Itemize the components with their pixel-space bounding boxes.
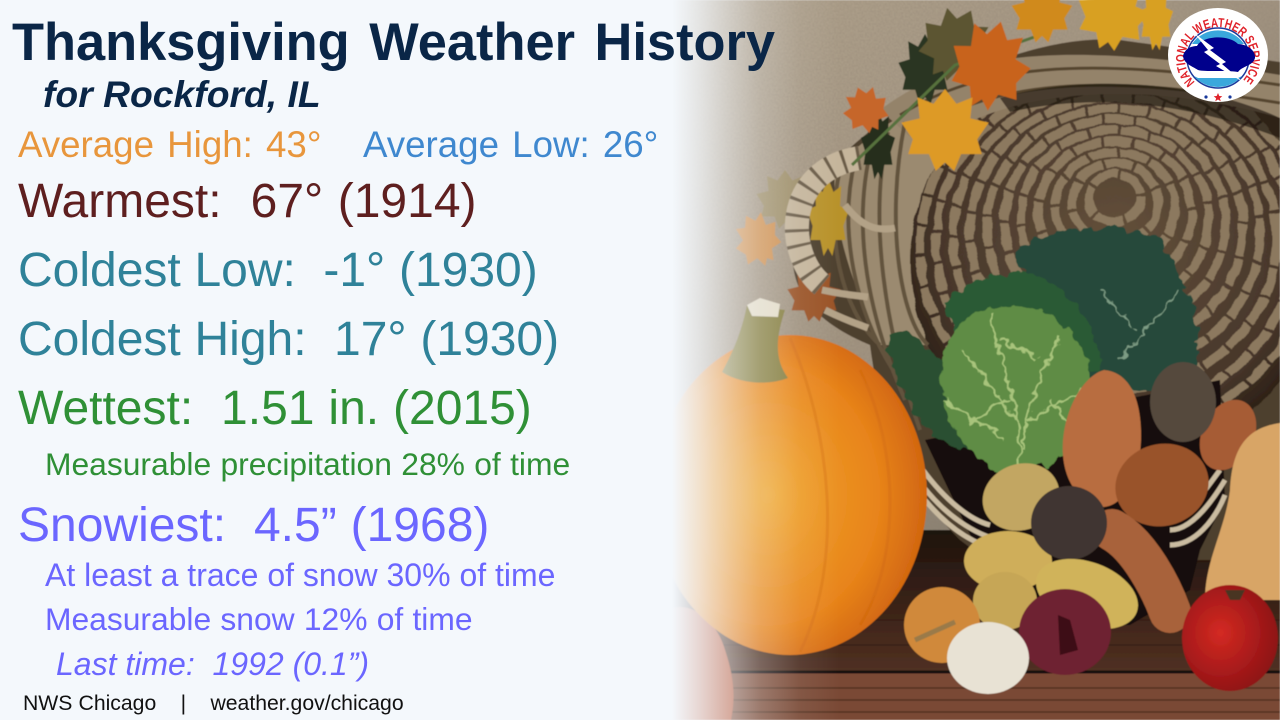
- basket handle braid: [797, 158, 895, 328]
- fade from text panel into photo: [640, 0, 840, 720]
- snowiest record: Snowiest: 4.5” (1968): [18, 499, 489, 552]
- average high: Average High: 43°: [18, 124, 322, 165]
- icon: National Weather Service logo: NATIONAL WEATHER SERVICE: [1176, 18, 1260, 88]
- basket interior and weave rings: [910, 94, 1280, 410]
- last measurable snow: Last time: 1992 (0.1”): [56, 646, 369, 682]
- cabbage: [889, 228, 1198, 471]
- coldest low record: Coldest Low: -1° (1930): [18, 244, 538, 297]
- outer left wall: [834, 121, 936, 346]
- trace snow frequency: At least a trace of snow 30% of time: [45, 557, 555, 593]
- title: Thanksgiving Weather History: [12, 14, 775, 72]
- left wall strands: [834, 122, 928, 430]
- autumn leaves on rim: [836, 0, 1173, 179]
- precipitation frequency: Measurable precipitation 28% of time: [45, 446, 570, 482]
- shadow under rim: [1000, 84, 1280, 138]
- shadow behind vegetables: [925, 380, 1225, 625]
- photo: cornucopia basket with autumn vegetables: [640, 0, 1280, 720]
- pumpkins: [677, 298, 928, 720]
- measurable snow frequency: Measurable snow 12% of time: [45, 601, 473, 637]
- rim band: [883, 54, 1280, 122]
- lower basket strands: [922, 470, 1225, 550]
- subtitle: for Rockford, IL: [43, 73, 321, 115]
- average low: Average Low: 26°: [363, 124, 658, 165]
- warmest record: Warmest: 67° (1914): [18, 175, 476, 228]
- wooden table: [640, 530, 1280, 720]
- basket body: [793, 39, 1280, 570]
- burlap backdrop: [680, 0, 1280, 530]
- footer credit: NWS Chicago | weather.gov/chicago: [23, 692, 404, 715]
- coldest high record: Coldest High: 17° (1930): [18, 313, 559, 366]
- autumn leaves behind handle: [726, 170, 849, 322]
- wettest record: Wettest: 1.51 in. (2015): [18, 382, 532, 435]
- vegetables: [904, 362, 1280, 694]
